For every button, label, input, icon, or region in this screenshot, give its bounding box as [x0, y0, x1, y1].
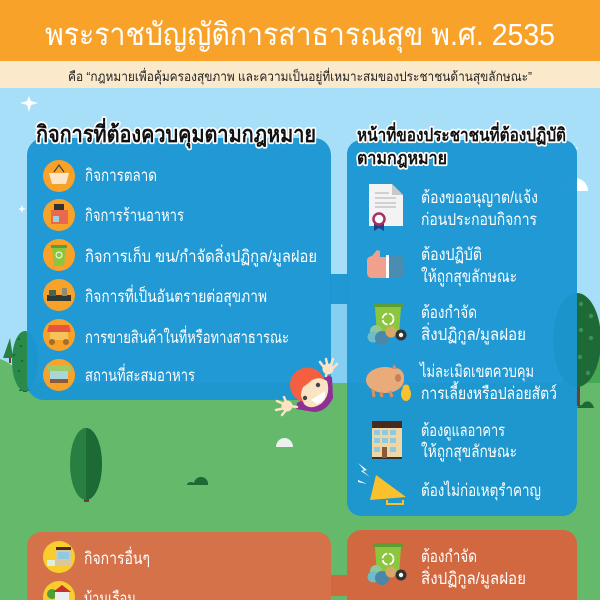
item: restaurant: กิจการร้านอาหาร — [85, 206, 184, 225]
duty: licence: ก่อนประกอบกิจการ — [421, 210, 537, 229]
duty: building: ต้องดูแลอาคาร — [421, 421, 505, 441]
item: street vending: การขายสินค้าในที่หรือทางสาธารณะ — [85, 325, 289, 347]
background: sky — [0, 88, 600, 384]
duty: no nuisance: ต้องไม่ก่อเหตุรำคาญ — [421, 480, 541, 501]
panel: other businesses — [27, 532, 331, 600]
heading left: กิจการที่ต้องควบคุมตามกฎหมาย — [36, 117, 316, 149]
duty: comply — [367, 245, 517, 287]
duty: building: ให้ถูกสุขลักษณะ — [421, 441, 517, 462]
panel: duties of citizens — [347, 122, 577, 516]
connector: orange — [330, 575, 348, 596]
connector: blue — [330, 274, 348, 304]
duty: dispose waste: สิ่งปฏิกูล/มูลฝอย — [421, 566, 526, 589]
item: food storage: สถานที่สะสมอาหาร — [85, 363, 195, 385]
duty: no nuisance — [358, 463, 541, 504]
panel: household duty — [347, 530, 577, 600]
duty: dispose waste — [368, 303, 526, 345]
rock — [276, 438, 293, 447]
duty: animals: การเลี้ยงหรือปล่อยสัตว์ — [421, 381, 557, 403]
item: hazardous: กิจการที่เป็นอันตรายต่อสุขภาพ — [85, 284, 267, 307]
heading right: หน้าที่ของประชาชนที่ต้องปฏิบัติ — [357, 122, 566, 145]
tree: centre — [70, 428, 102, 502]
background: hill left — [0, 359, 30, 384]
duty: building — [372, 421, 517, 462]
header band — [0, 0, 600, 61]
bush right — [577, 401, 594, 408]
item: hazardous — [43, 279, 267, 311]
background: sky channel — [331, 304, 347, 384]
item: food storage — [43, 359, 195, 391]
tree: left — [12, 331, 38, 392]
panel: duties of citizens: ตามกฎหมาย — [357, 148, 447, 168]
duty: animals — [366, 361, 557, 403]
sparkles — [18, 96, 579, 213]
item: street vending — [43, 319, 289, 351]
item: other businesses: กิจการอื่นๆ — [84, 546, 150, 568]
background: grass — [0, 383, 600, 600]
bush centre — [187, 477, 208, 485]
item: waste: กิจการเก็บ ขน/กำจัดสิ่งปฏิกูล/มูลฝอย — [85, 244, 317, 267]
item: households — [43, 581, 136, 600]
cloud right — [562, 178, 588, 191]
duty: dispose waste — [368, 543, 526, 589]
title: พระราชบัญญัติการสาธารณสุข พ.ศ. 2535 — [45, 17, 555, 54]
duty: licence: ต้องขออนุญาต/แจ้ง — [421, 188, 538, 208]
tree: right — [553, 293, 600, 406]
girl character — [276, 359, 337, 415]
pine left — [3, 338, 13, 363]
duty: dispose waste: ต้องกำจัด — [421, 303, 477, 322]
definition text: คือ “กฎหมายเพื่อคุ้มครองสุขภาพ และความเป็นอยู่ที่เหมาะสมของประชาชนด้านสุขลักษณะ” — [68, 67, 532, 85]
duty: dispose waste: สิ่งปฏิกูล/มูลฝอย — [421, 322, 526, 345]
item: market: กิจการตลาด — [85, 166, 157, 185]
duty: animals: ไม่ละเมิดเขตควบคุม — [418, 361, 534, 382]
item: restaurant — [43, 199, 184, 231]
background: hill right — [560, 352, 600, 384]
item: other businesses — [43, 541, 150, 573]
duty: comply: ให้ถูกสุขลักษณะ — [421, 266, 517, 287]
duty: dispose waste: ต้องกำจัด — [421, 547, 477, 566]
definition band — [0, 61, 600, 88]
duty: licence — [369, 184, 538, 231]
panel: controlled businesses — [27, 117, 331, 400]
duty: comply: ต้องปฏิบัติ — [421, 245, 482, 264]
item: market — [43, 160, 157, 192]
item: waste — [43, 239, 317, 271]
